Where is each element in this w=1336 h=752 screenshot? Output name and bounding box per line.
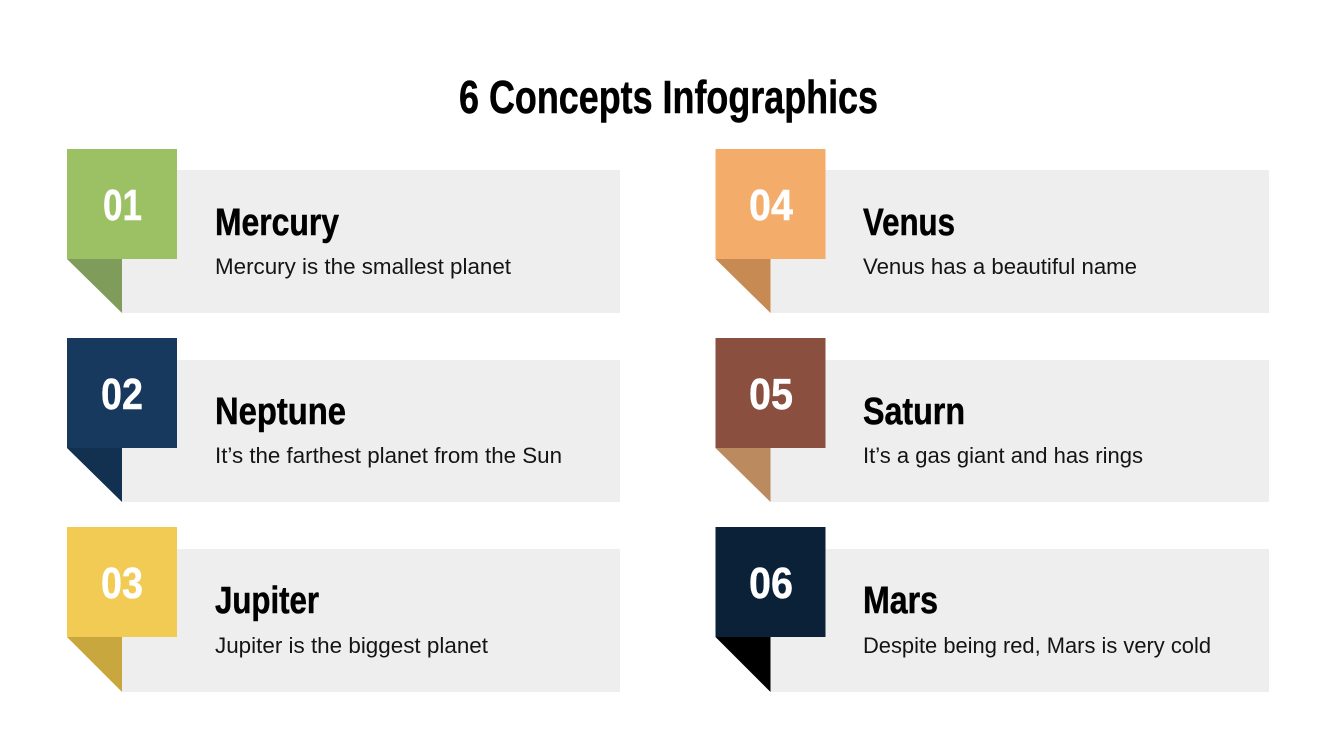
number square bbox=[67, 527, 177, 637]
card background bbox=[770, 549, 1269, 692]
fold bbox=[67, 448, 122, 502]
fold bbox=[67, 637, 122, 692]
card background bbox=[122, 360, 620, 502]
panel: 01 Mercury bbox=[67, 149, 620, 313]
heading: Venus bbox=[863, 202, 955, 244]
description: Mercury is the smallest planet bbox=[215, 254, 511, 279]
fold bbox=[716, 637, 770, 692]
heading: Mars bbox=[863, 580, 938, 622]
description: It’s a gas giant and has rings bbox=[863, 443, 1143, 468]
number: 03 bbox=[101, 559, 143, 608]
panel: 06 Mars bbox=[716, 527, 1269, 692]
number square bbox=[716, 527, 826, 637]
heading: Jupiter bbox=[215, 580, 319, 622]
number square bbox=[716, 338, 826, 448]
description: Despite being red, Mars is very cold bbox=[863, 633, 1211, 658]
panel: 04 Venus bbox=[716, 149, 1269, 313]
number square bbox=[67, 149, 177, 259]
heading: Mercury bbox=[215, 202, 339, 244]
description: Venus has a beautiful name bbox=[863, 254, 1137, 279]
description: It’s the farthest planet from the Sun bbox=[215, 443, 562, 468]
card background bbox=[770, 360, 1269, 502]
card background bbox=[122, 549, 620, 692]
panel: 02 Neptune bbox=[67, 338, 620, 502]
number: 05 bbox=[749, 370, 793, 419]
card background bbox=[770, 170, 1269, 313]
card background bbox=[122, 170, 620, 313]
number: 01 bbox=[103, 181, 142, 230]
fold bbox=[67, 259, 122, 313]
number: 06 bbox=[749, 559, 793, 608]
number: 02 bbox=[101, 370, 143, 419]
description: Jupiter is the biggest planet bbox=[215, 633, 488, 658]
panel: 05 Saturn bbox=[716, 338, 1269, 502]
fold bbox=[716, 448, 770, 502]
heading: Neptune bbox=[215, 391, 346, 433]
heading: Saturn bbox=[863, 391, 965, 433]
number square bbox=[716, 149, 826, 259]
number square bbox=[67, 338, 177, 448]
panel: 03 Jupiter bbox=[67, 527, 620, 692]
fold bbox=[716, 259, 770, 313]
number: 04 bbox=[749, 181, 793, 230]
title: 6 Concepts Infographics bbox=[459, 71, 878, 123]
